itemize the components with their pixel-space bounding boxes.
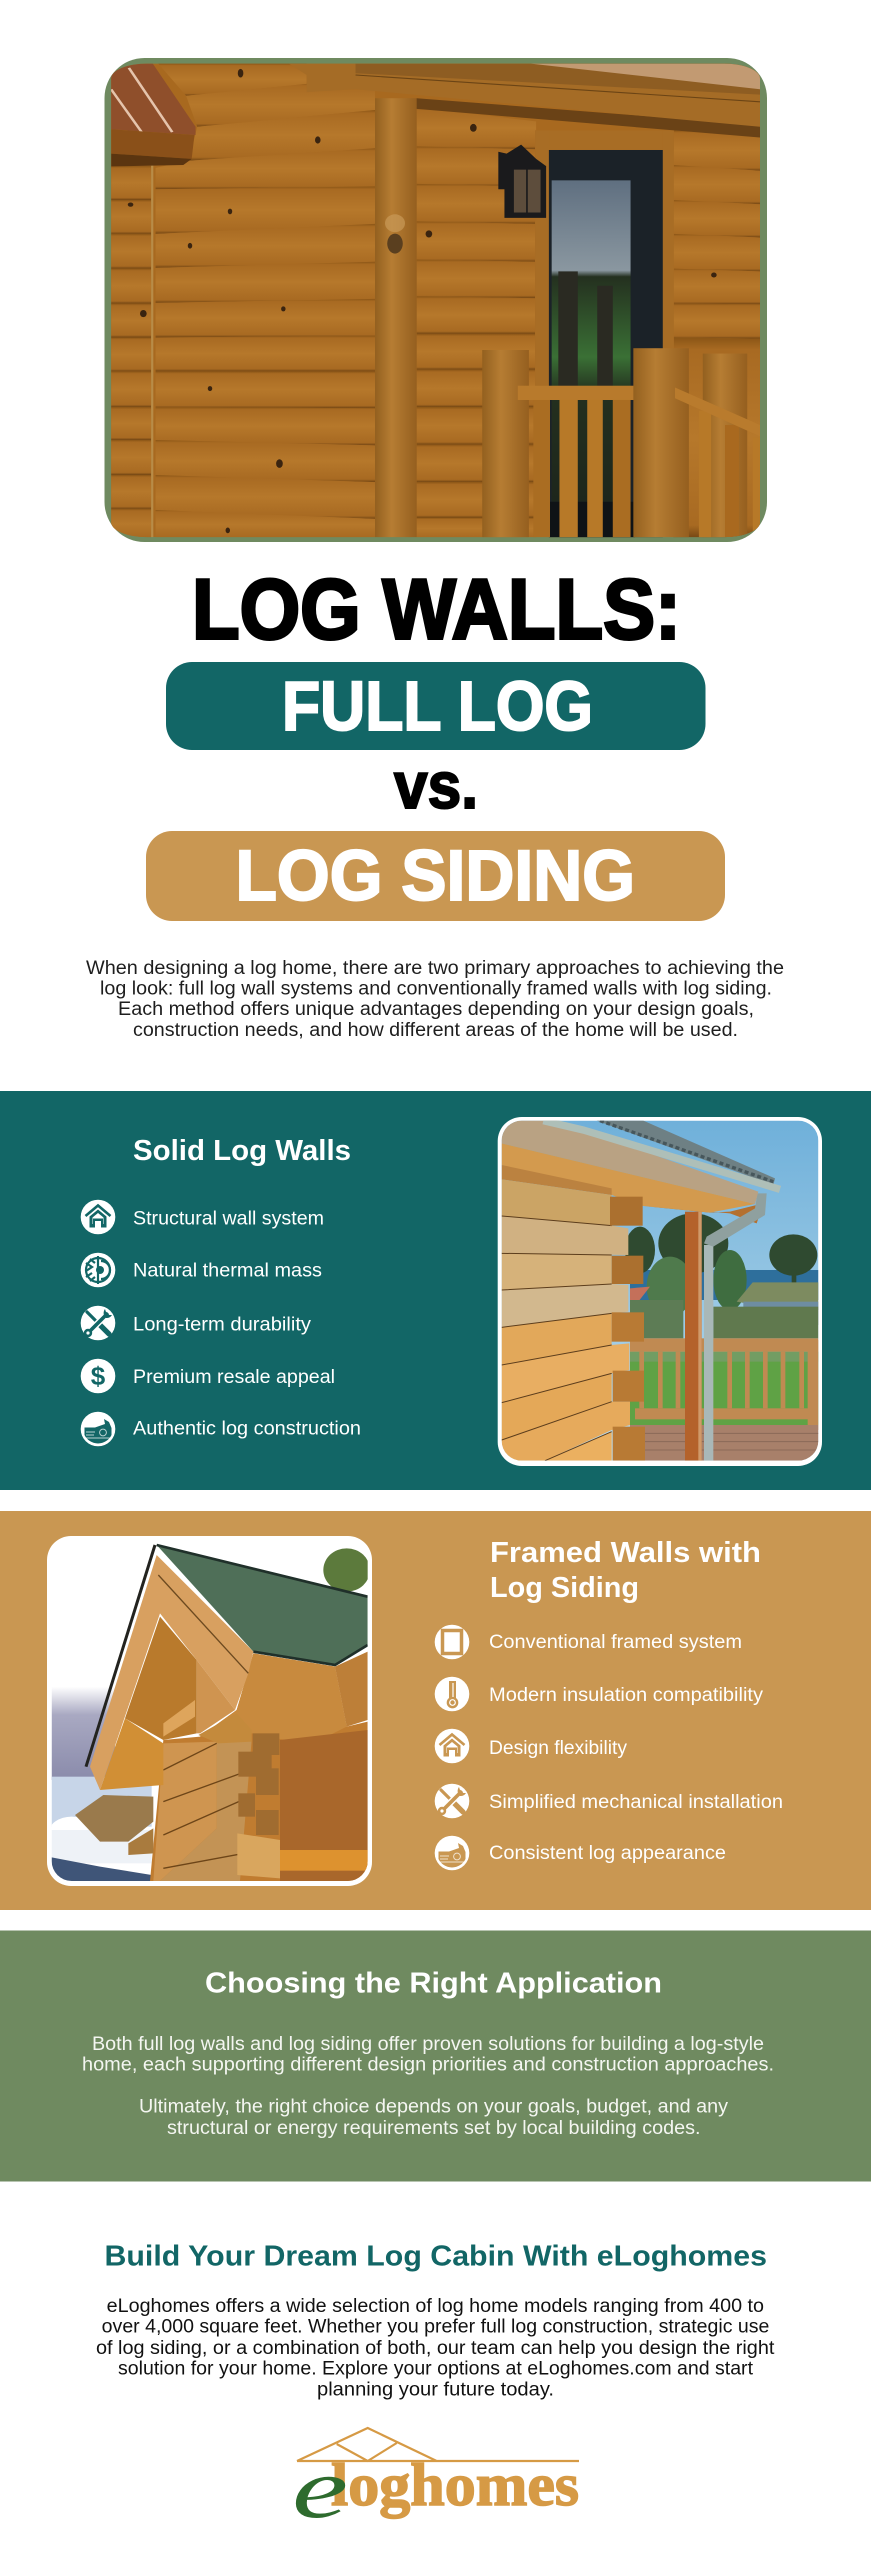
list item: modern insulation compatibility: Modern insulation compatibility bbox=[489, 1685, 764, 1706]
logo: eloghomes bbox=[292, 2428, 579, 2536]
list item: authentic log construction: Authentic log construction bbox=[133, 1418, 361, 1440]
list item: structural wall system: Structural wall system bbox=[133, 1208, 324, 1229]
list item: premium resale appeal bbox=[81, 1359, 335, 1393]
list item: conventional framed system bbox=[435, 1625, 742, 1659]
body text: call to action: planning your future today. bbox=[317, 2380, 554, 2400]
intro text: When designing a log home, there are two primary approaches to achieving the bbox=[86, 958, 784, 979]
panel: framed walls with log siding bbox=[0, 1511, 871, 1910]
intro text: construction needs, and how different areas of the home will be used. bbox=[133, 1020, 738, 1041]
logo: green e: e bbox=[292, 2440, 348, 2536]
pill: log siding: LOG SIDING bbox=[236, 837, 635, 916]
body text: call to action: of log siding, or a combination of both, our team can help you design the right bbox=[96, 2338, 775, 2359]
heading: framed walls with log siding: Log Siding bbox=[490, 1572, 639, 1604]
hero: wall lamp bbox=[498, 145, 546, 218]
hero: left wall logs bbox=[111, 164, 153, 539]
hero: door trim bbox=[535, 130, 674, 387]
body text: call to action: solution for your home. Explore your options at eLoghomes.com and start bbox=[118, 2359, 754, 2380]
hero: main wall logs bbox=[156, 64, 375, 539]
list item: natural thermal mass: Natural thermal mass bbox=[133, 1261, 322, 1282]
body text: call to action: eLoghomes offers a wide selection of log home models ranging from 400 to bbox=[107, 2296, 764, 2317]
main title: LOG WALLS: bbox=[192, 562, 681, 658]
heading: choosing the right application: Choosing the Right Application bbox=[205, 1968, 662, 2000]
heading: solid log walls: Solid Log Walls bbox=[133, 1135, 351, 1167]
logo: wordmark: loghomes bbox=[331, 2452, 579, 2518]
list item: premium resale appeal: $ bbox=[91, 1361, 106, 1391]
body text: choosing bbox=[82, 2034, 774, 2139]
intro text: Each method offers unique advantages depending on your design goals, bbox=[118, 999, 754, 1020]
list item: premium resale appeal: Premium resale appeal bbox=[133, 1367, 335, 1388]
list item: structural wall system bbox=[81, 1200, 324, 1234]
body text: call to action bbox=[96, 2296, 775, 2400]
hero: wood knots bbox=[128, 69, 717, 533]
photo: framed gable with log siding bbox=[47, 1536, 372, 1886]
intro text bbox=[86, 958, 784, 1041]
intro text: log look: full log wall systems and conventionally framed walls with log siding. bbox=[100, 978, 772, 1000]
hero: right wall logs bbox=[417, 107, 760, 539]
heading: framed walls with log siding: Framed Walls with bbox=[490, 1537, 761, 1569]
hero: porch posts and railing bbox=[482, 348, 760, 539]
list item: simplified mechanical installation bbox=[435, 1784, 783, 1818]
list item: consistent log appearance bbox=[435, 1836, 726, 1870]
logo: roof truss mark bbox=[297, 2428, 579, 2461]
heading: call to action: Build Your Dream Log Cabin With eLoghomes bbox=[104, 2241, 767, 2273]
hero: main roof eave bbox=[289, 64, 760, 137]
heading: framed walls with log siding bbox=[490, 1537, 761, 1604]
hero photo: log wall porch bbox=[104, 58, 767, 542]
pill: full log: FULL LOG bbox=[282, 667, 593, 745]
body text: call to action: over 4,000 square feet. Whether you prefer full log construction, strategic use bbox=[102, 2317, 769, 2338]
list item: modern insulation compatibility bbox=[435, 1677, 764, 1711]
list item: design flexibility bbox=[435, 1729, 627, 1763]
list item: long-term durability bbox=[81, 1306, 312, 1340]
list item: conventional framed system: Conventional framed system bbox=[489, 1632, 742, 1653]
body text: choosing: home, each supporting different design priorities and construction approaches. bbox=[82, 2055, 774, 2076]
body text: choosing: structural or energy requirements set by local building codes. bbox=[167, 2118, 700, 2139]
panel: choosing the right application bbox=[0, 1930, 871, 2182]
pill: log siding bbox=[146, 831, 725, 921]
list item: design flexibility: Design flexibility bbox=[489, 1738, 627, 1759]
list item: consistent log appearance: Consistent log appearance bbox=[489, 1843, 726, 1864]
pill: full log bbox=[166, 662, 706, 750]
photo: log wall corner with deck bbox=[498, 1117, 822, 1466]
list item: long-term durability: Long-term durability bbox=[133, 1315, 312, 1336]
panel: solid log walls bbox=[0, 1091, 871, 1490]
list item: natural thermal mass bbox=[81, 1253, 322, 1287]
hero: dark door and window glass bbox=[549, 150, 663, 539]
vs. label: vs. bbox=[394, 748, 478, 822]
list item: simplified mechanical installation: Simplified mechanical installation bbox=[489, 1792, 783, 1813]
list item: authentic log construction bbox=[81, 1412, 361, 1446]
body text: choosing: Ultimately, the right choice depends on your goals, budget, and any bbox=[139, 2097, 729, 2118]
hero: round post with knot bbox=[375, 98, 417, 539]
body text: choosing: Both full log walls and log siding offer proven solutions for building a log-style bbox=[92, 2034, 764, 2055]
hero: left small roof and fascia bbox=[111, 64, 196, 166]
